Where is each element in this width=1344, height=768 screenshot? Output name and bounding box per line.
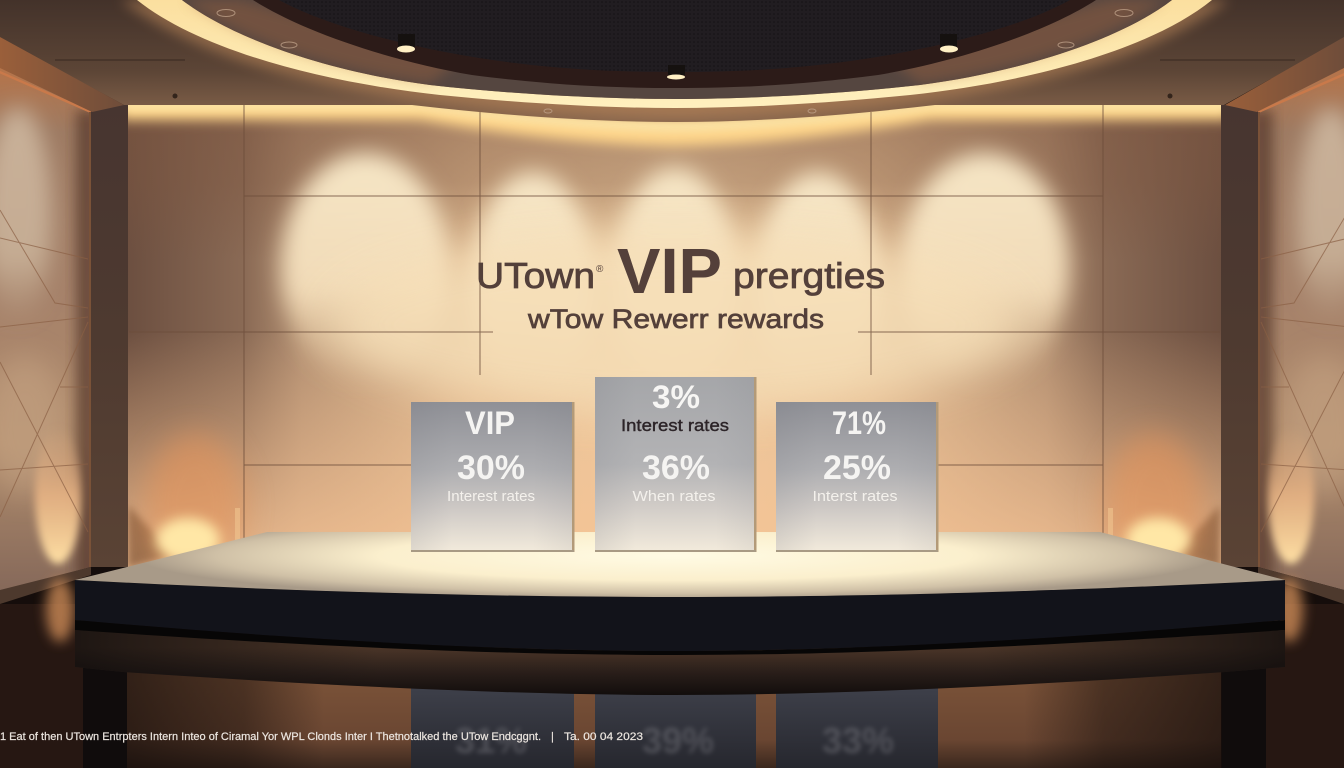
VIP box — [411, 402, 574, 552]
right box: 25% — [823, 449, 891, 487]
stage platform — [75, 532, 1285, 695]
ceiling glow — [120, 0, 1230, 118]
wall pillars — [91, 105, 1258, 569]
center box: When rates — [632, 488, 716, 505]
footer note: 1 Eat of then UTown Entrpters Intern Inteo of Ciramal Yor WPL Clonds Inter I Thetnotalked the UTow Endcggnt. — [0, 731, 541, 743]
title: ® — [596, 264, 604, 275]
subtitle: wTow Rewerr rewards — [527, 304, 824, 334]
stage top surface — [75, 532, 1285, 597]
left side wall — [0, 60, 98, 594]
stage front face — [75, 580, 1285, 651]
right box: Interst rates — [812, 488, 898, 505]
ceiling — [0, 0, 1344, 122]
box reflections — [411, 680, 938, 768]
box reflections: 39% — [642, 720, 714, 761]
center box: Interest rates — [621, 416, 729, 435]
title — [476, 235, 885, 307]
recessed lights — [217, 10, 1133, 113]
right box — [776, 402, 938, 552]
VIP box: 30% — [457, 449, 525, 487]
VIP box: Interest rates — [447, 488, 535, 505]
box reflections: 33% — [822, 720, 894, 761]
title: UTown — [476, 255, 595, 296]
footer note: | — [551, 731, 554, 743]
floor with reflections — [0, 567, 1344, 768]
title: prergties — [733, 255, 885, 296]
VIP box: VIP — [465, 405, 515, 441]
dark recess — [253, 0, 1096, 88]
right side wall — [1251, 60, 1344, 594]
stage reflection band — [75, 630, 1285, 695]
box reflections: 31% — [455, 720, 527, 761]
center box: 3% — [652, 379, 700, 415]
downlights — [397, 34, 958, 80]
title: VIP — [617, 235, 722, 307]
cove light ring — [137, 0, 1212, 108]
back wall — [120, 98, 1230, 577]
footer note: Ta. 00 04 2023 — [564, 731, 643, 743]
spotlights on wall — [120, 98, 1230, 577]
mesh ceiling disc — [279, 0, 1070, 72]
ring soffit — [182, 0, 1172, 99]
right box: 71% — [832, 405, 886, 441]
center box — [595, 377, 756, 552]
center box: 36% — [642, 449, 710, 487]
